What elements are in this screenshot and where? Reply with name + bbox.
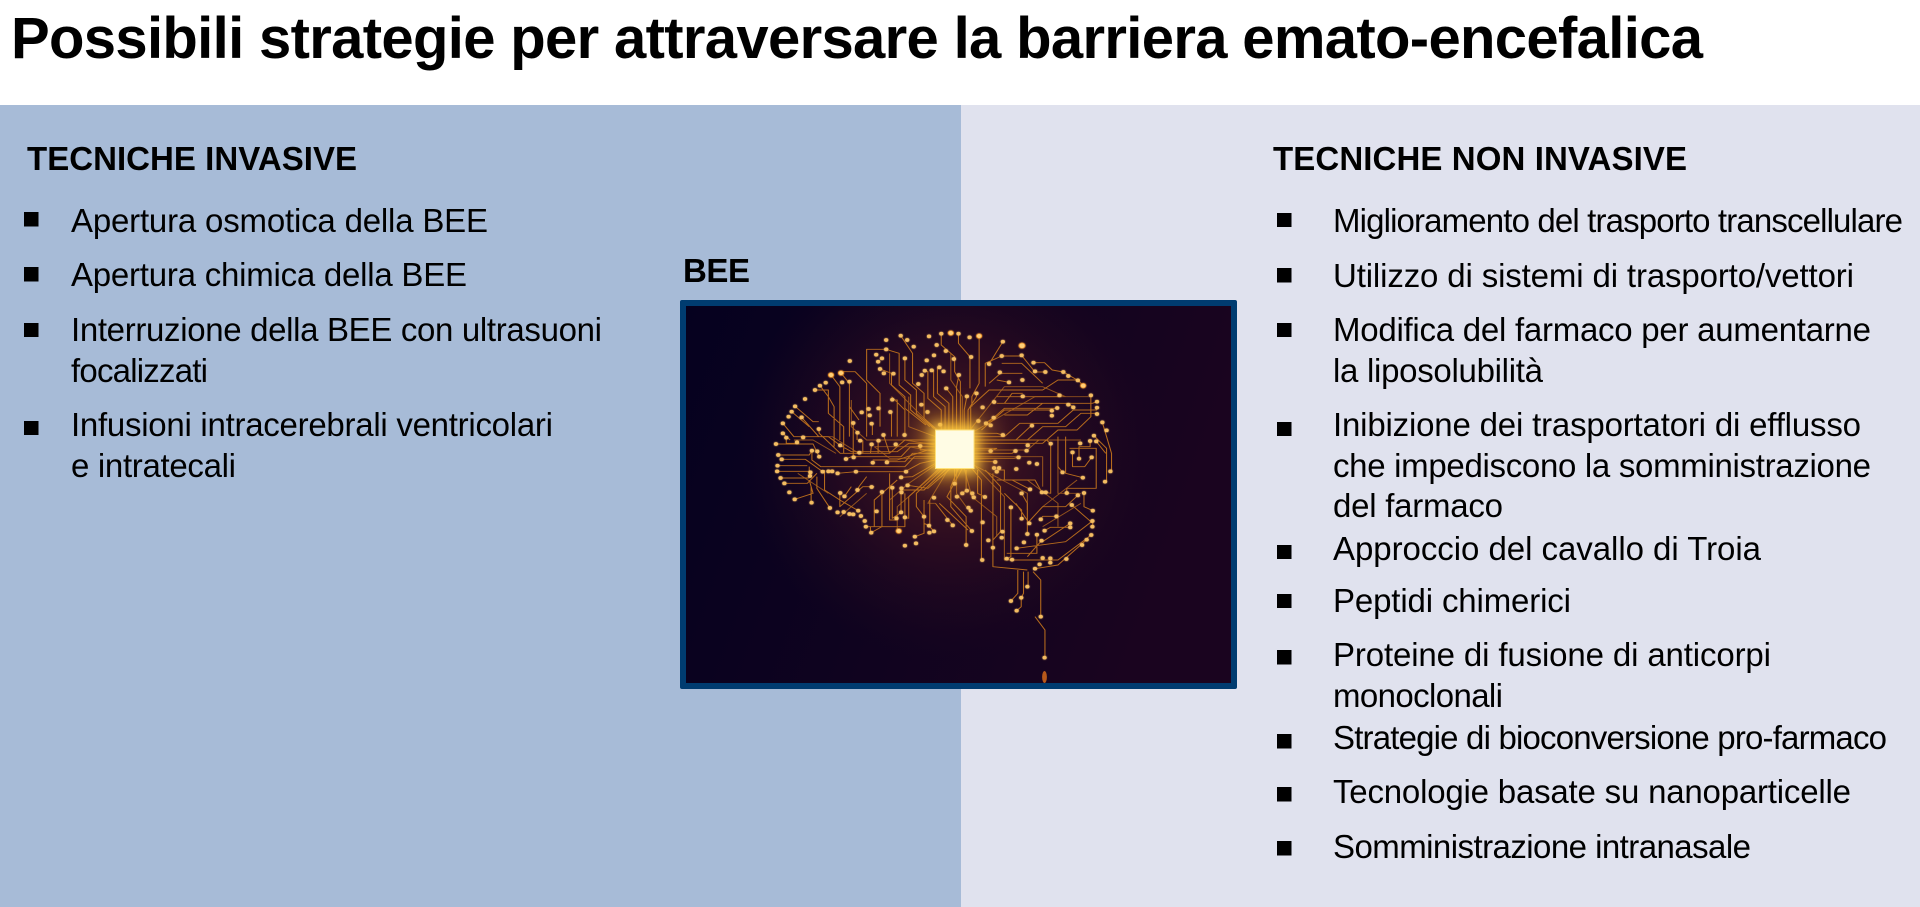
heading: tecniche invasive: TECNICHE INVASIVE	[27, 140, 357, 177]
heading: BEE: BEE	[683, 252, 750, 289]
bullet: ultrasuoni focalizzati: Interruzione della BEE con ultrasuoni	[71, 311, 602, 348]
bullet: infusioni: Infusioni intracerebrali ventricolari	[71, 406, 553, 443]
bullet: trasportatori di efflusso	[1277, 406, 1871, 524]
title: Possibili strategie per attraversare la barriera emato-encefalica	[11, 6, 1704, 71]
bullet: cavallo di Troia: Approccio del cavallo di Troia	[1333, 530, 1762, 567]
bullet: proteine di fusione: monoclonali	[1333, 677, 1503, 714]
bullet: proteine di fusione	[1277, 636, 1771, 714]
bullet: apertura chimica: Apertura chimica della BEE	[71, 256, 467, 293]
bullet: intranasale: Somministrazione intranasale	[1333, 828, 1751, 865]
bullet: bioconversione: Strategie di bioconversione pro-farmaco	[1333, 719, 1887, 756]
bullet: liposolubilita: Modifica del farmaco per aumentarne	[1333, 311, 1871, 348]
image background	[686, 306, 1231, 683]
bullet: trasporto transcellulare: Miglioramento del trasporto transcellulare	[1333, 202, 1903, 239]
brain circuit traces	[775, 334, 1112, 658]
panel: invasive techniques background	[0, 105, 961, 907]
bullet: sistemi di trasporto: Utilizzo di sistemi di trasporto/vettori	[1333, 257, 1854, 294]
bullet: ultrasuoni focalizzati: focalizzati	[71, 352, 208, 389]
bullet: trasportatori di efflusso: del farmaco	[1333, 487, 1503, 524]
panel: non-invasive techniques background	[961, 105, 1920, 907]
bullet: liposolubilita	[1277, 311, 1871, 389]
heading: tecniche non invasive: TECNICHE NON INVASIVE	[1273, 140, 1687, 177]
bullet: liposolubilita: la liposolubilità	[1333, 352, 1544, 389]
bullet: nanoparticelle: Tecnologie basate su nanoparticelle	[1333, 773, 1851, 810]
list: non-invasive techniques	[1277, 202, 1903, 865]
bullet: peptidi chimerici: Peptidi chimerici	[1333, 582, 1571, 619]
panel: invasive techniques content	[24, 140, 602, 484]
bottom signal glow	[1042, 671, 1047, 683]
bullet: proteine di fusione: Proteine di fusione di anticorpi	[1333, 636, 1771, 673]
brain circuit nodes	[776, 331, 1110, 658]
chip	[931, 425, 978, 473]
chip glow	[922, 417, 987, 481]
bullet: trasportatori di efflusso: Inibizione dei trasportatori di efflusso	[1333, 406, 1861, 443]
bullet: ultrasuoni focalizzati	[24, 311, 602, 389]
bullet: apertura osmotica: Apertura osmotica della BEE	[71, 202, 488, 239]
panel: non-invasive techniques content	[1273, 140, 1903, 865]
bullet: trasportatori di efflusso: che impediscono la somministrazione	[1333, 447, 1871, 484]
image: glowing circuit brain	[680, 300, 1237, 689]
bullet: infusioni	[24, 406, 553, 484]
list: invasive techniques	[24, 202, 602, 484]
image frame	[680, 300, 1237, 689]
bullet: infusioni: e intratecali	[71, 447, 236, 484]
